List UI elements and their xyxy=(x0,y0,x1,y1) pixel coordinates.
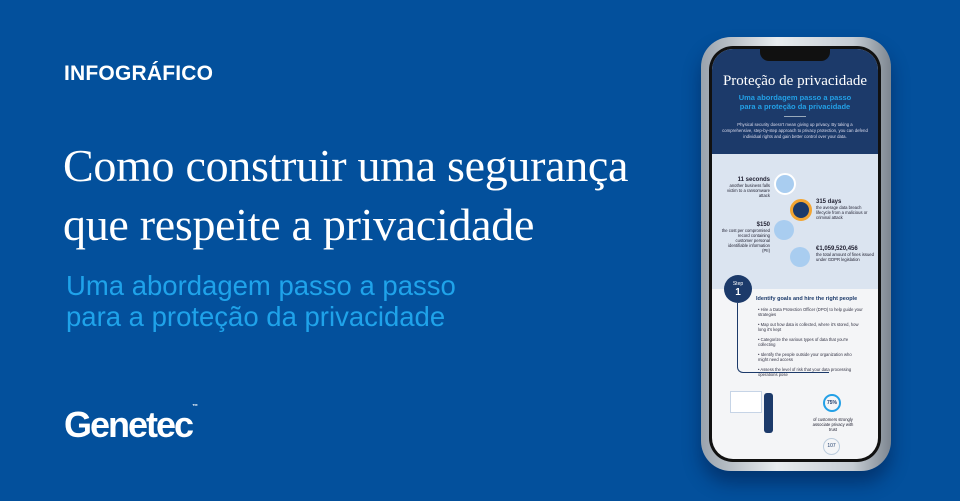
step 1: 1 xyxy=(735,287,741,298)
stats section: 11 seconds xyxy=(738,177,770,183)
screen header xyxy=(712,49,878,154)
phone screen: • Identify the people outside your organization who might need access xyxy=(758,352,852,362)
screen header: Physical security doesn't mean giving up privacy. By taking a comprehensive, step-by-step approach to privacy protection, you can defend individual rights and gain better control over your data. xyxy=(722,122,868,139)
title xyxy=(63,140,628,250)
stats section: the total amount of fines issued under GDPR legislation xyxy=(816,252,874,262)
stats section: €1,059,520,456 xyxy=(816,246,858,252)
phone screen: of customers strongly associate privacy with trust xyxy=(813,417,853,432)
screen header: Proteção de privacidade xyxy=(723,73,867,89)
stat 75%: 75% xyxy=(827,400,837,406)
phone screen: • Map out how data is collected, where it's stored, how long it's kept xyxy=(758,322,858,332)
stats section: the cost per compromised record containing customer personal identifiable information (PII) xyxy=(722,228,770,253)
notch xyxy=(760,49,830,61)
label: INFOGRÁFICO: INFOGRÁFICO xyxy=(64,62,213,85)
screen header: Uma abordagem passo a passo xyxy=(739,93,851,102)
stats section: 315 days xyxy=(816,199,841,205)
illustration: presenter xyxy=(730,391,762,413)
phone screen: • Assess the level of risk that your data processing operations pose xyxy=(758,367,851,377)
step 1 xyxy=(724,275,752,303)
phone xyxy=(701,37,891,471)
stats section: another business falls victim to a ransomware attack xyxy=(727,183,770,198)
phone screen: • Categorize the various types of data that you're collecting xyxy=(758,337,848,347)
title: que respeite a privacidade xyxy=(63,199,534,250)
logo: Genetec: Genetec™ xyxy=(64,404,198,445)
stats section xyxy=(712,154,878,289)
step 1: Step xyxy=(733,281,743,287)
stat 75% xyxy=(823,394,841,412)
title: Como construir uma segurança xyxy=(63,140,628,191)
stats section: $150 xyxy=(757,222,770,228)
screen header: para a proteção da privacidade xyxy=(740,102,850,111)
subtitle: para a proteção da privacidade xyxy=(66,301,445,332)
stats section: the average data breach lifecycle from a malicious or criminal attack xyxy=(816,205,867,220)
phone screen xyxy=(709,46,881,462)
phone screen: • Hire a Data Protection Officer (DPO) to help guide your strategies xyxy=(758,307,863,317)
subtitle: Uma abordagem passo a passo xyxy=(66,270,456,301)
phone screen: Identify goals and hire the right people xyxy=(756,296,857,302)
subtitle xyxy=(66,270,456,332)
phone screen: 107 xyxy=(827,443,836,449)
